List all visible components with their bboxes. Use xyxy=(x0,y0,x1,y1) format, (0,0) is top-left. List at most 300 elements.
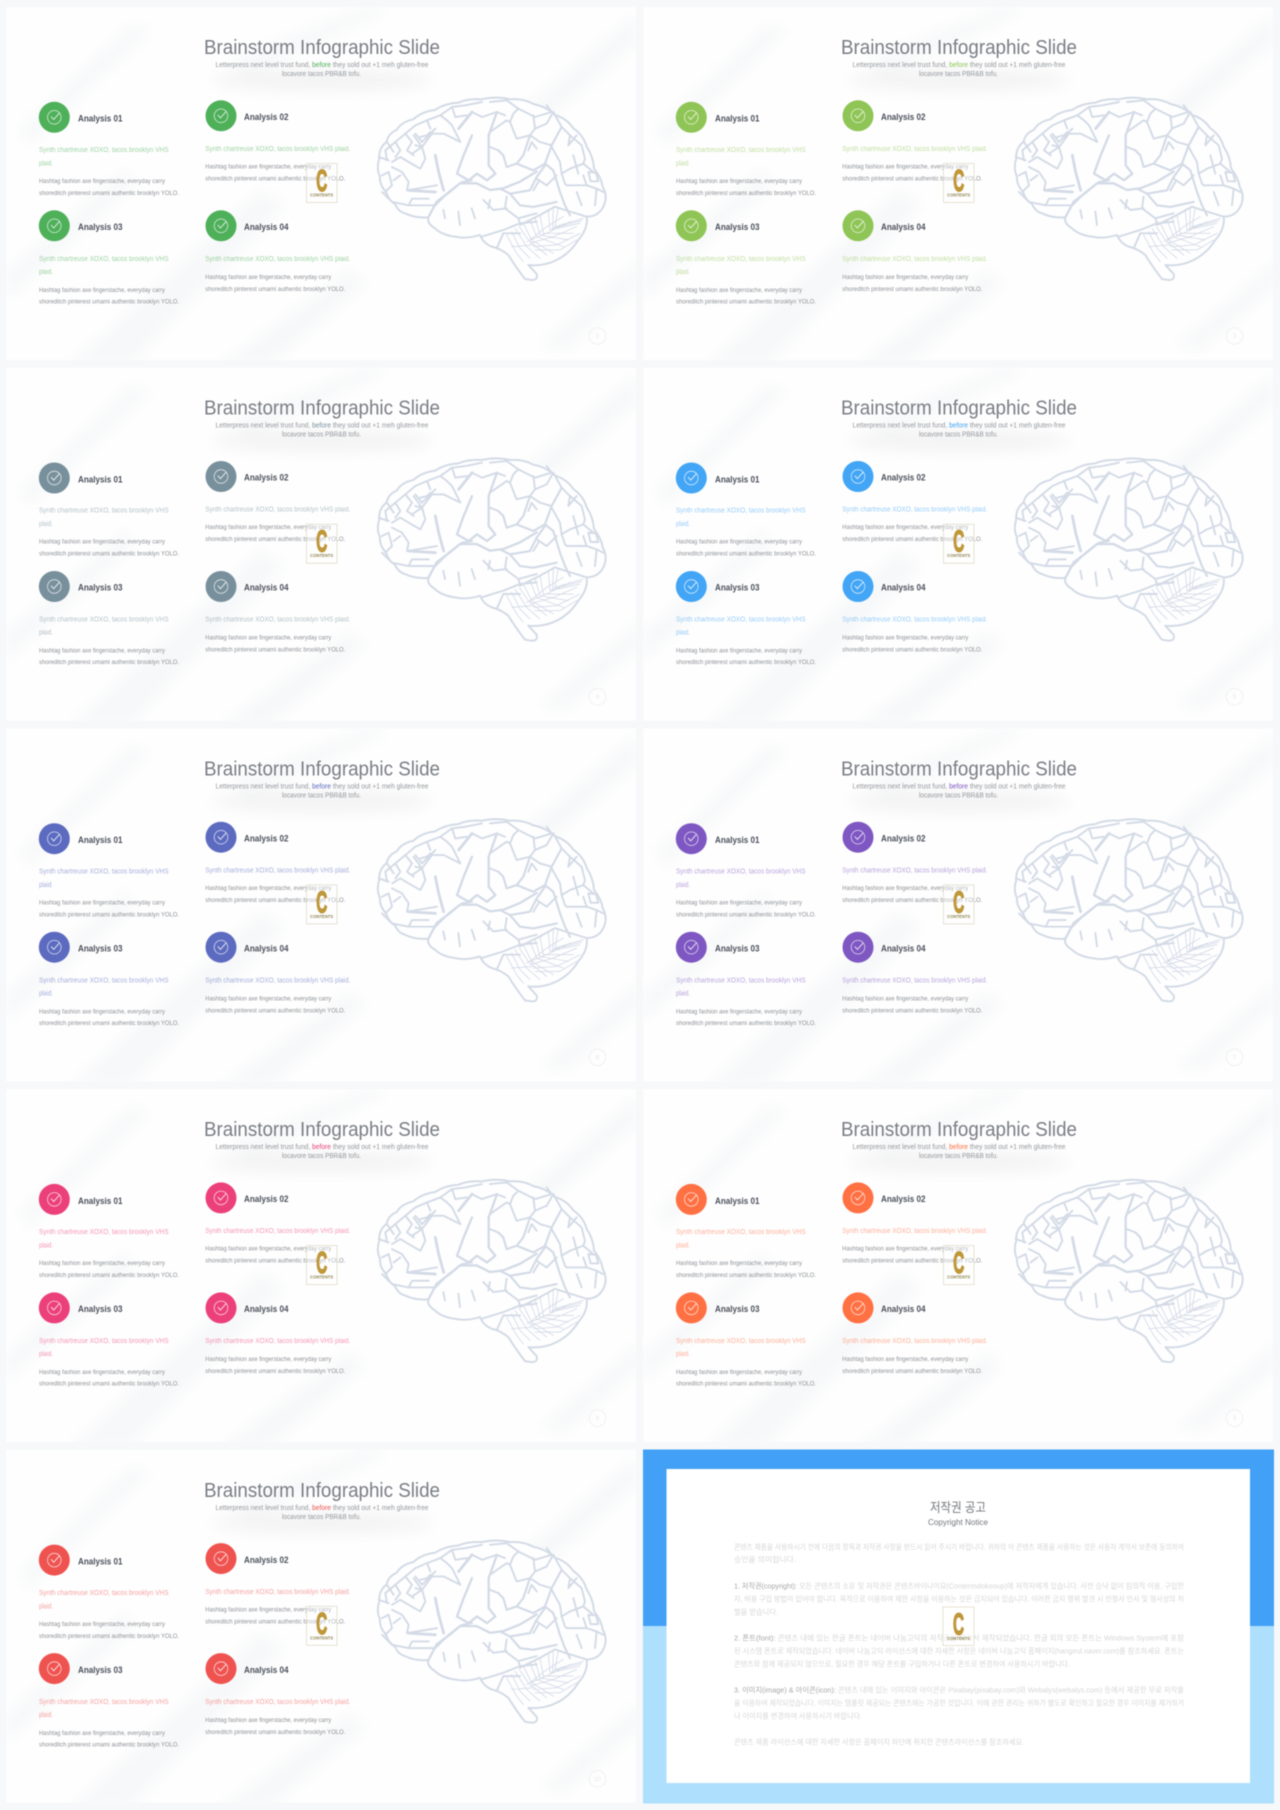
watermark xyxy=(943,1606,974,1646)
name: Analysis 04 xyxy=(244,943,288,953)
name: Analysis 03 xyxy=(78,222,122,232)
body: shoreditch pinterest umami authentic brooklyn YOLO. xyxy=(205,1618,345,1625)
body: shoreditch pinterest umami authentic brooklyn YOLO. xyxy=(205,1007,345,1014)
name: Analysis 03 xyxy=(78,943,122,953)
body: shoreditch pinterest umami authentic brooklyn YOLO. xyxy=(676,1272,816,1279)
highlight xyxy=(39,1590,169,1610)
brain illustration xyxy=(1015,458,1243,641)
paragraph: copyright xyxy=(734,1580,1184,1616)
highlight xyxy=(676,508,806,528)
notice heading: Copyright Notice xyxy=(928,1517,988,1527)
body xyxy=(39,648,179,666)
body: Hashtag fashion axe fingerstache, everyday carry xyxy=(39,648,166,655)
brain illustration xyxy=(378,458,606,641)
body: Hashtag fashion axe fingerstache, everyday carry xyxy=(676,899,803,906)
highlight: plaid. xyxy=(676,269,690,276)
watermark: CONTENTS xyxy=(947,1275,970,1280)
icon: check xyxy=(842,571,874,602)
highlight: plaid. xyxy=(39,630,53,637)
icon: check xyxy=(842,1292,874,1323)
watermark xyxy=(306,1245,337,1285)
body: Hashtag fashion axe fingerstache, everyday carry xyxy=(205,274,332,281)
icon: check xyxy=(39,1292,70,1323)
body: Hashtag fashion axe fingerstache, everyday carry xyxy=(842,635,969,642)
subtitle: locavore tacos PBR&B tofu. xyxy=(282,1514,361,1521)
body xyxy=(205,1717,345,1736)
subtitle: Letterpress next level trust fund, before they sold out +1 meh gluten-free xyxy=(216,1505,429,1512)
highlight: Synth chartreuse XOXO, tacos brooklyn VHS xyxy=(39,1338,169,1345)
highlight xyxy=(676,1229,806,1250)
highlight: plaid. xyxy=(39,1712,53,1719)
body xyxy=(39,178,179,197)
body: shoreditch pinterest umami authentic brooklyn YOLO. xyxy=(39,1272,179,1279)
highlight: plaid. xyxy=(39,1603,53,1610)
body xyxy=(205,885,345,904)
highlight: plaid. xyxy=(676,630,690,637)
paragraph: copyright: 1. 저작권(copyright): 모든 콘텐츠의 소유 및 저작권은 콘텐츠바이나이요(Contentsdokeoup)에 저작자에게 있습니다. 사전 승낙 없이 임의적 이용, 구입한 xyxy=(734,1580,1184,1590)
subtitle: locavore tacos PBR&B tofu. xyxy=(282,1153,361,1160)
body: shoreditch pinterest umami authentic brooklyn YOLO. xyxy=(842,647,982,654)
body: Hashtag fashion axe fingerstache, everyday carry xyxy=(39,1008,166,1015)
body: shoreditch pinterest umami authentic brooklyn YOLO. xyxy=(676,190,816,197)
highlight: Synth chartreuse XOXO, tacos brooklyn VHS plaid. xyxy=(842,146,987,153)
highlight: Synth chartreuse XOXO, tacos brooklyn VHS xyxy=(39,1699,169,1706)
paragraph: copyright: 벌을 받습니다. xyxy=(734,1606,778,1616)
body: shoreditch pinterest umami authentic brooklyn YOLO. xyxy=(842,1368,982,1375)
name: Analysis 04 xyxy=(881,583,926,593)
body: shoreditch pinterest umami authentic brooklyn YOLO. xyxy=(842,897,982,904)
icon: check xyxy=(842,210,874,241)
watermark: C xyxy=(953,524,964,559)
icon: check xyxy=(676,1292,707,1323)
analysis 03 xyxy=(39,1653,179,1748)
body: Hashtag fashion axe fingerstache, everyday carry xyxy=(39,1260,166,1267)
highlight: Synth chartreuse XOXO, tacos brooklyn VHS xyxy=(39,1229,169,1236)
analysis 01 xyxy=(39,102,179,197)
brain illustration xyxy=(1015,98,1243,280)
body: shoreditch pinterest umami authentic brooklyn YOLO. xyxy=(205,176,345,182)
watermark: CONTENTS xyxy=(947,914,970,919)
highlight: Synth chartreuse XOXO, tacos brooklyn VHS xyxy=(676,617,806,624)
brain illustration xyxy=(378,819,606,1001)
name: Analysis 01 xyxy=(78,835,122,845)
body: Hashtag fashion axe fingerstache, everyday carry xyxy=(842,164,969,170)
icon: check xyxy=(39,1545,70,1576)
body: shoreditch pinterest umami authentic brooklyn YOLO. xyxy=(39,190,179,197)
watermark: CONTENTS xyxy=(310,914,333,919)
icon: check xyxy=(676,823,707,854)
highlight: Synth chartreuse XOXO, tacos brooklyn VHS plaid. xyxy=(205,1228,350,1235)
white notice panel xyxy=(666,1469,1250,1783)
body xyxy=(39,899,179,918)
body xyxy=(842,274,982,293)
highlight xyxy=(39,977,169,997)
body xyxy=(39,1008,179,1027)
analysis 02 xyxy=(205,100,350,182)
body: Hashtag fashion axe fingerstache, everyday carry xyxy=(205,1606,332,1613)
intro paragraph xyxy=(734,1542,1184,1564)
analysis 04 xyxy=(205,1292,350,1375)
body xyxy=(842,524,982,543)
body xyxy=(676,178,816,197)
analysis 03 xyxy=(676,210,816,306)
highlight: plaid. xyxy=(39,990,53,997)
brain illustration xyxy=(1015,1180,1243,1362)
highlight: plaid. xyxy=(39,160,53,168)
paragraph: font: 콘텐츠와 함께 제공되지 않으므로, 필요한 경우 해당 폰트를 구입하거나 다른 폰트로 변경하여 사용하시기 바랍니다. xyxy=(734,1658,1070,1668)
body xyxy=(676,1260,816,1279)
slide 2: light green xyxy=(643,5,1277,365)
icon: check xyxy=(206,571,236,602)
highlight xyxy=(676,617,806,637)
subtitle xyxy=(852,423,1066,439)
highlight: plaid. xyxy=(676,1243,690,1250)
page number: 3 xyxy=(1233,334,1237,340)
name: Analysis 01 xyxy=(78,1196,122,1206)
page number xyxy=(589,1410,606,1426)
body xyxy=(39,287,179,306)
highlight xyxy=(676,256,806,276)
highlight: Synth chartreuse XOXO, tacos brooklyn VHS xyxy=(676,256,806,263)
watermark xyxy=(306,884,337,924)
body xyxy=(676,287,816,306)
subtitle xyxy=(216,1505,429,1521)
page number: 9 xyxy=(1233,1416,1237,1422)
body: Hashtag fashion axe fingerstache, everyday carry xyxy=(39,287,166,294)
highlight xyxy=(39,617,169,637)
slide background xyxy=(643,726,1277,1086)
body xyxy=(205,995,345,1014)
page number: 7 xyxy=(1233,1055,1237,1061)
analysis 03 xyxy=(39,210,179,306)
highlight: Synth chartreuse XOXO, tacos brooklyn VHS xyxy=(39,868,169,875)
subtitle: Letterpress next level trust fund, before they sold out +1 meh gluten-free xyxy=(852,1144,1066,1151)
title: Brainstorm Infographic Slide xyxy=(841,1119,1077,1141)
analysis 01 xyxy=(676,1184,816,1279)
icon: check xyxy=(206,1292,236,1323)
highlight: Synth chartreuse XOXO, tacos brooklyn VHS xyxy=(39,147,169,154)
slide background xyxy=(643,366,1277,726)
highlight: Synth chartreuse XOXO, tacos brooklyn VHS xyxy=(676,1338,806,1345)
intro paragraph: 콘텐츠 제품을 사용하시기 전에 다음의 항목과 저작권 사항을 반드시 읽어 주시기 바랍니다. 귀하의 이 콘텐츠 제품을 사용하는 것은 사용자 계약서 보존에 동의하여 xyxy=(734,1542,1184,1552)
icon: check xyxy=(676,102,707,133)
watermark xyxy=(944,524,974,563)
highlight: plaid. xyxy=(39,521,53,528)
analysis 02 xyxy=(205,822,350,904)
highlight: Synth chartreuse XOXO, tacos brooklyn VHS plaid. xyxy=(205,507,350,514)
watermark: C xyxy=(953,884,964,919)
title: Brainstorm Infographic Slide xyxy=(204,758,440,780)
highlight: Synth chartreuse XOXO, tacos brooklyn VHS xyxy=(39,617,169,624)
name: Analysis 03 xyxy=(715,1304,760,1314)
body: shoreditch pinterest umami authentic brooklyn YOLO. xyxy=(39,1741,179,1748)
body: Hashtag fashion axe fingerstache, everyday carry xyxy=(205,164,332,170)
watermark: CONTENTS xyxy=(310,192,333,198)
body: shoreditch pinterest umami authentic brooklyn YOLO. xyxy=(39,1633,179,1640)
icon: check xyxy=(206,1543,236,1574)
body: Hashtag fashion axe fingerstache, everyday carry xyxy=(205,1246,332,1253)
page number: 6 xyxy=(596,1055,600,1061)
paragraph: copyright: 자, 비용 구입 방법이 있어야 합니다. 목적으로 이용하여 제한 사항을 이용하는 것은 금지되어 있습니다. 이러한 금지 행위 발견 시 민형사 민사 및 형사상의 처 xyxy=(734,1594,1184,1604)
name: Analysis 01 xyxy=(78,474,122,484)
body xyxy=(842,635,982,654)
highlight: Synth chartreuse XOXO, tacos brooklyn VHS xyxy=(39,1590,169,1597)
body xyxy=(39,1260,179,1279)
page number xyxy=(1226,1410,1243,1426)
name: Analysis 03 xyxy=(78,1665,122,1675)
analysis 03 xyxy=(676,571,816,666)
subtitle xyxy=(216,783,429,799)
highlight: plaid. xyxy=(39,882,53,889)
title: Brainstorm Infographic Slide xyxy=(204,37,440,59)
name: Analysis 01 xyxy=(78,114,122,124)
highlight xyxy=(39,508,169,528)
body: Hashtag fashion axe fingerstache, everyday carry xyxy=(205,524,332,531)
slide 5: indigo xyxy=(6,726,640,1086)
blue frame top xyxy=(643,1450,1274,1626)
body xyxy=(676,1008,816,1027)
body xyxy=(842,1246,982,1265)
page number xyxy=(1226,688,1243,705)
analysis 02 xyxy=(842,100,987,182)
title: Brainstorm Infographic Slide xyxy=(841,398,1077,420)
body: Hashtag fashion axe fingerstache, everyday carry xyxy=(205,885,332,892)
name: Analysis 02 xyxy=(244,1555,288,1565)
body xyxy=(39,1730,179,1748)
analysis 04 xyxy=(205,571,350,654)
name: Analysis 02 xyxy=(244,112,288,122)
highlight: Synth chartreuse XOXO, tacos brooklyn VHS xyxy=(676,977,806,984)
highlight: Synth chartreuse XOXO, tacos brooklyn VHS xyxy=(676,1229,806,1236)
highlight: Synth chartreuse XOXO, tacos brooklyn VHS plaid. xyxy=(205,617,350,624)
body: Hashtag fashion axe fingerstache, everyday carry xyxy=(205,1356,332,1363)
icon: check xyxy=(842,100,874,131)
slide background xyxy=(643,5,1277,365)
body: shoreditch pinterest umami authentic brooklyn YOLO. xyxy=(842,176,982,182)
name: Analysis 01 xyxy=(715,835,760,845)
page number xyxy=(589,1770,606,1787)
subtitle xyxy=(852,1144,1066,1160)
body: Hashtag fashion axe fingerstache, everyday carry xyxy=(39,539,166,546)
notice heading xyxy=(928,1500,988,1527)
watermark xyxy=(306,163,337,202)
paragraph: image and icon: 3. 이미지(image) & 아이콘(icon): 콘텐츠 내에 있는 이미지와 아이콘은 Pixabay(pixabay.com)와 Webalys(webalys.com) 등에서 제공한 무료 저작물 xyxy=(734,1684,1184,1694)
name: Analysis 02 xyxy=(881,833,926,843)
analysis 01 xyxy=(39,823,179,918)
icon: check xyxy=(206,932,236,963)
analysis 04 xyxy=(842,932,987,1014)
highlight xyxy=(39,147,169,168)
name: Analysis 03 xyxy=(715,222,760,232)
watermark: C xyxy=(953,163,964,198)
subtitle: locavore tacos PBR&B tofu. xyxy=(282,432,361,439)
highlight: Synth chartreuse XOXO, tacos brooklyn VHS xyxy=(39,508,169,515)
subtitle: locavore tacos PBR&B tofu. xyxy=(919,432,998,439)
body: Hashtag fashion axe fingerstache, everyday carry xyxy=(39,1369,166,1376)
subtitle: locavore tacos PBR&B tofu. xyxy=(919,1153,998,1160)
body: Hashtag fashion axe fingerstache, everyday carry xyxy=(676,1369,803,1376)
title: Brainstorm Infographic Slide xyxy=(204,398,440,420)
page number: 8 xyxy=(596,1416,600,1422)
watermark: CONTENTS xyxy=(947,553,970,558)
brain illustration xyxy=(378,1540,606,1723)
subtitle: locavore tacos PBR&B tofu. xyxy=(919,71,998,78)
name: Analysis 02 xyxy=(881,473,926,483)
subtitle: Letterpress next level trust fund, before they sold out +1 meh gluten-free xyxy=(852,783,1066,790)
icon: check xyxy=(39,823,70,854)
icon: check xyxy=(842,932,874,963)
analysis 02 xyxy=(205,461,350,543)
name: Analysis 04 xyxy=(244,222,288,232)
slide 6: purple xyxy=(643,726,1277,1086)
body: shoreditch pinterest umami authentic brooklyn YOLO. xyxy=(205,1729,345,1736)
icon: check xyxy=(676,210,707,241)
watermark xyxy=(944,884,974,924)
watermark: C xyxy=(953,1245,964,1280)
icon: check xyxy=(206,100,236,131)
highlight: Synth chartreuse XOXO, tacos brooklyn VHS plaid. xyxy=(205,977,350,984)
body: shoreditch pinterest umami authentic brooklyn YOLO. xyxy=(676,551,816,558)
brain illustration xyxy=(378,1180,606,1362)
body xyxy=(842,885,982,904)
icon: check xyxy=(39,1653,70,1684)
icon: check xyxy=(39,462,70,494)
analysis 03 xyxy=(39,571,179,666)
analysis 04 xyxy=(842,210,987,293)
analysis 01 xyxy=(676,462,816,558)
analysis 03 xyxy=(676,1292,816,1388)
highlight: plaid. xyxy=(676,990,690,997)
subtitle: Letterpress next level trust fund, before they sold out +1 meh gluten-free xyxy=(216,1144,429,1151)
name: Analysis 04 xyxy=(244,1665,288,1675)
body: shoreditch pinterest umami authentic brooklyn YOLO. xyxy=(39,1020,179,1027)
icon: check xyxy=(676,462,707,494)
notice heading: 저작권 공고 xyxy=(930,1500,986,1515)
watermark: C xyxy=(953,1606,964,1642)
title: Brainstorm Infographic Slide xyxy=(204,1480,440,1502)
body: Hashtag fashion axe fingerstache, everyday carry xyxy=(205,995,332,1002)
highlight xyxy=(39,1699,169,1719)
page number: 4 xyxy=(596,695,600,701)
body xyxy=(205,1606,345,1625)
highlight: Synth chartreuse XOXO, tacos brooklyn VHS plaid. xyxy=(842,1228,987,1235)
icon: check xyxy=(206,461,236,492)
body xyxy=(205,524,345,543)
highlight xyxy=(39,1338,169,1358)
name: Analysis 04 xyxy=(881,1304,926,1314)
body: Hashtag fashion axe fingerstache, everyday carry xyxy=(676,539,803,546)
paragraph: image and icon xyxy=(734,1684,1184,1720)
icon: check xyxy=(676,1184,707,1215)
name: Analysis 03 xyxy=(715,583,760,593)
body: Hashtag fashion axe fingerstache, everyday carry xyxy=(676,287,803,294)
slide background xyxy=(6,726,640,1086)
paragraph: font xyxy=(734,1632,1184,1668)
name: Analysis 01 xyxy=(78,1557,122,1567)
watermark: C xyxy=(316,1606,327,1641)
subtitle: Letterpress next level trust fund, before they sold out +1 meh gluten-free xyxy=(852,62,1066,69)
analysis 04 xyxy=(205,932,350,1014)
light blue frame bottom xyxy=(643,1626,1274,1804)
analysis 03 xyxy=(676,932,816,1027)
slide 7: pink xyxy=(6,1087,640,1447)
analysis 03 xyxy=(39,932,179,1027)
body: Hashtag fashion axe fingerstache, everyday carry xyxy=(842,1356,969,1363)
body: shoreditch pinterest umami authentic brooklyn YOLO. xyxy=(205,286,345,293)
paragraph: image and icon: 나 이미지를 변경하여 사용하시기 바랍니다. xyxy=(734,1710,862,1720)
body: shoreditch pinterest umami authentic brooklyn YOLO. xyxy=(676,1381,816,1388)
body: Hashtag fashion axe fingerstache, everyday carry xyxy=(205,635,332,642)
icon: check xyxy=(676,932,707,963)
subtitle: Letterpress next level trust fund, before they sold out +1 meh gluten-free xyxy=(216,783,429,790)
highlight xyxy=(676,147,806,168)
highlight xyxy=(676,977,806,997)
highlight: Synth chartreuse XOXO, tacos brooklyn VHS plaid. xyxy=(842,507,987,514)
slide 4: blue xyxy=(643,366,1277,726)
body: Hashtag fashion axe fingerstache, everyday carry xyxy=(676,178,803,185)
name: Analysis 04 xyxy=(244,1304,288,1314)
slide 3: blue grey xyxy=(6,366,640,726)
analysis 01 xyxy=(676,102,816,197)
name: Analysis 03 xyxy=(715,943,760,953)
name: Analysis 03 xyxy=(78,583,122,593)
icon: check xyxy=(206,210,236,241)
body: shoreditch pinterest umami authentic brooklyn YOLO. xyxy=(205,897,345,904)
body: Hashtag fashion axe fingerstache, everyday carry xyxy=(39,899,166,906)
highlight: Synth chartreuse XOXO, tacos brooklyn VHS plaid. xyxy=(205,1338,350,1345)
highlight: Synth chartreuse XOXO, tacos brooklyn VHS plaid. xyxy=(205,146,350,153)
slide 9: red xyxy=(6,1448,640,1808)
watermark: C xyxy=(316,163,327,198)
highlight: Synth chartreuse XOXO, tacos brooklyn VHS plaid. xyxy=(205,1589,350,1596)
watermark: C xyxy=(316,524,327,559)
icon: check xyxy=(842,461,874,492)
analysis 02 xyxy=(842,461,987,543)
brain illustration xyxy=(378,98,606,280)
body xyxy=(205,274,345,293)
highlight: Synth chartreuse XOXO, tacos brooklyn VHS xyxy=(39,256,169,263)
page number: 10 xyxy=(594,1777,601,1783)
highlight: plaid. xyxy=(676,882,690,889)
subtitle: Letterpress next level trust fund, before they sold out +1 meh gluten-free xyxy=(216,423,429,430)
highlight: Synth chartreuse XOXO, tacos brooklyn VHS plaid. xyxy=(842,867,987,874)
analysis 02 xyxy=(205,1543,350,1625)
name: Analysis 02 xyxy=(881,1194,926,1204)
highlight: Synth chartreuse XOXO, tacos brooklyn VHS plaid. xyxy=(842,977,987,984)
title: Brainstorm Infographic Slide xyxy=(841,758,1077,780)
body: shoreditch pinterest umami authentic brooklyn YOLO. xyxy=(39,911,179,918)
body xyxy=(676,899,816,918)
title: Brainstorm Infographic Slide xyxy=(841,37,1077,59)
body: Hashtag fashion axe fingerstache, everyday carry xyxy=(842,524,969,531)
body xyxy=(39,1369,179,1388)
brain illustration xyxy=(1015,819,1243,1001)
subtitle: locavore tacos PBR&B tofu. xyxy=(282,71,361,78)
slide background xyxy=(6,5,640,365)
body: shoreditch pinterest umami authentic brooklyn YOLO. xyxy=(205,1368,345,1375)
subtitle: locavore tacos PBR&B tofu. xyxy=(919,792,998,799)
body: Hashtag fashion axe fingerstache, everyday carry xyxy=(205,1717,332,1724)
name: Analysis 02 xyxy=(244,473,288,483)
slide 10: copyright notice xyxy=(643,1450,1274,1804)
watermark: CONTENTS xyxy=(947,1636,970,1641)
body xyxy=(39,539,179,558)
name: Analysis 01 xyxy=(715,1196,760,1206)
body: Hashtag fashion axe fingerstache, everyday carry xyxy=(39,1730,166,1737)
paragraph: image and icon: 을 이용하여 제작되었습니다. 이미지는 템플릿 제공되는 콘텐츠에는 가공한 것입니다. 이에 관한 권리는 귀하가 별도로 확인하고 필요한 경우 이미지를 제거하거 xyxy=(734,1698,1184,1708)
body: shoreditch pinterest umami authentic brooklyn YOLO. xyxy=(39,1381,179,1388)
slide background xyxy=(6,366,640,726)
